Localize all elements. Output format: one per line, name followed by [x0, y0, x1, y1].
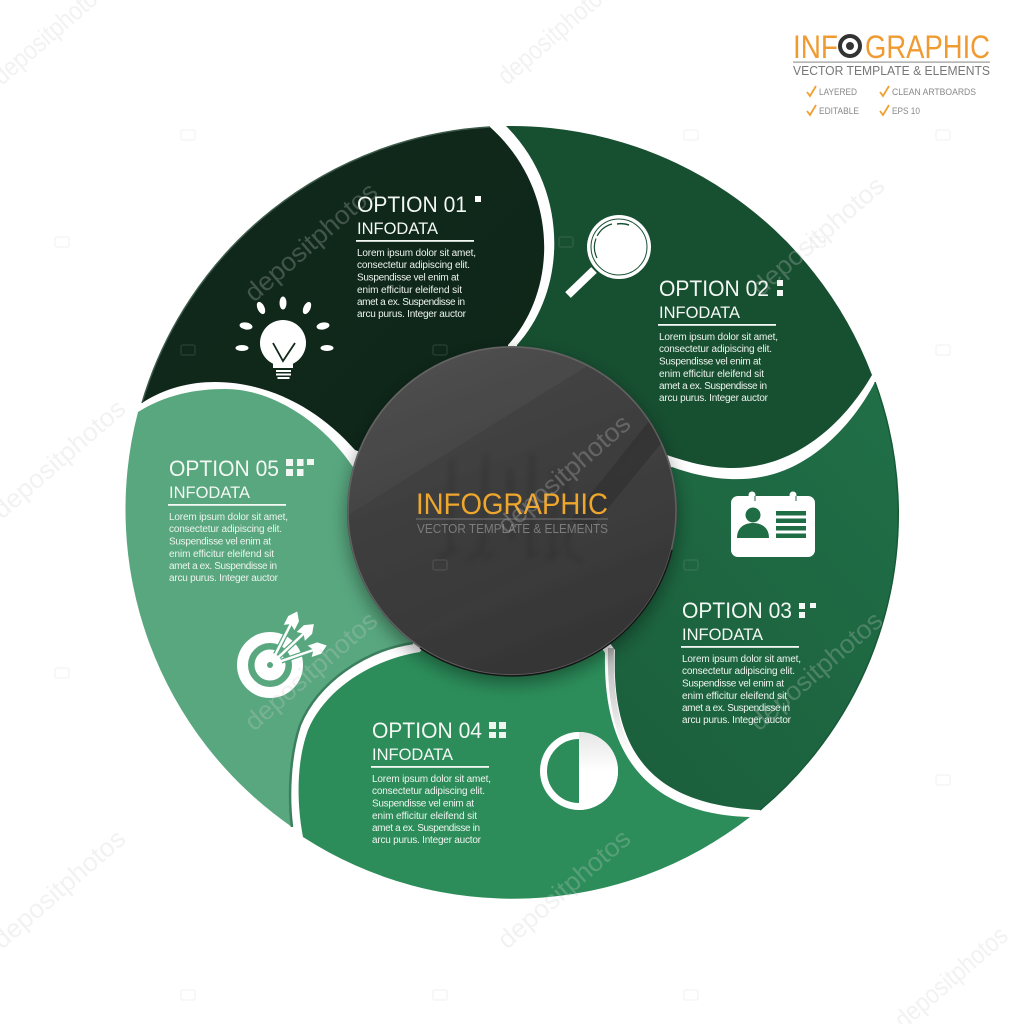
logo: top right: [793, 29, 990, 116]
panel: option 01: [142, 127, 544, 511]
text block: option 01: arcu purus. Integer auctor: [357, 309, 467, 320]
panel: option 05: [125, 389, 512, 827]
icon: half circle: [544, 732, 618, 810]
text block: option 03: OPTION 03: [682, 598, 792, 623]
text block: option 05: OPTION 05: [169, 456, 279, 481]
watermarks: depositphotos: [491, 408, 636, 540]
square: option 01 marker: [475, 196, 481, 202]
watermarks: depositphotos: [743, 605, 888, 737]
text block: option 02: INFODATA: [659, 303, 741, 322]
text block: option 03: consectetur adipiscing elit.: [682, 666, 795, 677]
text block: option 01: consectetur adipiscing elit.: [357, 260, 470, 271]
text block: option 03: INFODATA: [682, 625, 764, 644]
text block: option 01: enim efficitur eleifend sit: [357, 285, 462, 296]
icon: magnifying glass: [568, 215, 651, 295]
text block: option 02: enim efficitur eleifend sit: [659, 369, 764, 380]
text block: option 04: Lorem ipsum dolor sit amet,: [372, 774, 491, 785]
text block: option 05: Lorem ipsum dolor sit amet,: [169, 512, 288, 523]
squares: option 03 marker: [799, 603, 816, 618]
text block: option 03: [681, 598, 801, 726]
text block: option 01: [356, 192, 476, 320]
text block: option 04: Suspendisse vel enim at: [372, 798, 474, 810]
panel: option 03: [512, 382, 898, 810]
squares: option 05 marker: [286, 459, 314, 476]
text block: option 05: arcu purus. Integer auctor: [169, 573, 279, 584]
text block: option 05: Suspendisse vel enim at: [169, 536, 271, 548]
silhouettes: [440, 455, 582, 562]
watermarks: depositphotos: [238, 605, 383, 737]
logo: top right: CLEAN ARTBOARDS: [892, 87, 976, 97]
icon: eye circle: [837, 33, 863, 59]
text block: option 04: INFODATA: [372, 745, 454, 764]
panel: option 04: [299, 511, 750, 899]
watermarks: depositphotos: [745, 170, 890, 302]
text block: option 04: arcu purus. Integer auctor: [372, 835, 482, 846]
text block: option 02: amet a ex. Suspendisse in: [659, 381, 767, 392]
panel: option 02: [506, 126, 872, 511]
watermarks: depositphotos: [238, 176, 383, 308]
text block: option 03: Lorem ipsum dolor sit amet,: [682, 654, 801, 665]
center disc: [340, 346, 690, 676]
text block: option 02: Lorem ipsum dolor sit amet,: [659, 332, 778, 343]
icon: target with arrows: [242, 609, 329, 692]
text block: option 05: INFODATA: [169, 483, 251, 502]
icon: light bulb: [236, 296, 334, 378]
text block: option 01: INFODATA: [357, 219, 439, 238]
text block: option 05: enim efficitur eleifend sit: [169, 549, 274, 560]
icon: id card: [731, 492, 815, 557]
text block: option 01: Suspendisse vel enim at: [357, 272, 459, 284]
text block: option 02: [658, 276, 778, 404]
text block: option 01: OPTION 01: [357, 192, 467, 217]
text block: option 03: Suspendisse vel enim at: [682, 678, 784, 690]
logo: top right: O: [838, 29, 863, 65]
text block: option 04: amet a ex. Suspendisse in: [372, 823, 480, 834]
squares: option 02 marker: [777, 280, 783, 296]
text block: option 01: Lorem ipsum dolor sit amet,: [357, 248, 476, 259]
center title: INFOGRAPHIC: [416, 488, 608, 521]
text block: option 05: [168, 456, 288, 584]
logo: top right: EDITABLE: [819, 106, 859, 116]
center subtitle: VECTOR TEMPLATE & ELEMENTS: [417, 521, 608, 536]
text block: option 02: Suspendisse vel enim at: [659, 356, 761, 368]
text block: option 03: amet a ex. Suspendisse in: [682, 703, 790, 714]
text block: option 03: arcu purus. Integer auctor: [682, 715, 792, 726]
watermarks: depositphotos: [491, 823, 636, 955]
text block: option 05: consectetur adipiscing elit.: [169, 524, 282, 535]
text block: option 02: consectetur adipiscing elit.: [659, 344, 772, 355]
text block: option 04: OPTION 04: [372, 718, 482, 743]
text block: option 04: [371, 718, 491, 846]
text block: option 02: arcu purus. Integer auctor: [659, 393, 769, 404]
logo: top right: GRAPHIC: [865, 29, 990, 65]
logo: top right: LAYERED: [819, 87, 857, 97]
logo: top right: EPS 10: [892, 106, 920, 116]
text block: option 01: amet a ex. Suspendisse in: [357, 297, 465, 308]
squares: option 04 marker: [489, 722, 506, 738]
text block: option 02: OPTION 02: [659, 276, 769, 301]
text block: option 03: enim efficitur eleifend sit: [682, 691, 787, 702]
text block: option 04: consectetur adipiscing elit.: [372, 786, 485, 797]
text block: option 05: amet a ex. Suspendisse in: [169, 561, 277, 572]
text block: option 04: enim efficitur eleifend sit: [372, 811, 477, 822]
logo: top right: INF: [793, 29, 838, 65]
logo: top right: VECTOR TEMPLATE & ELEMENTS: [793, 63, 990, 78]
